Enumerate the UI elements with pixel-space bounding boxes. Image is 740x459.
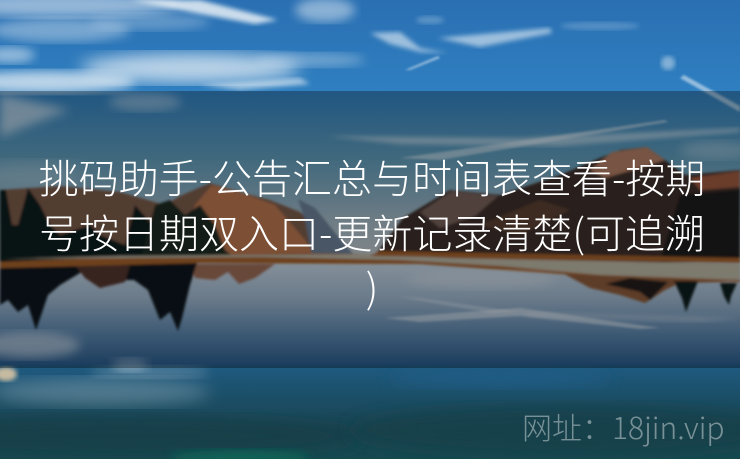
title: ) [366, 257, 378, 315]
clouds in sky [0, 0, 740, 189]
title: 挑码助手-公告汇总与时间表查看-按期 [39, 147, 705, 205]
dark translucent band [0, 91, 740, 368]
mountains and shore [0, 147, 740, 331]
watermark: 网址：18jin.vip [522, 404, 725, 448]
reflected clouds [0, 271, 740, 406]
title [39, 147, 705, 315]
title: 号按日期双入口-更新记录清楚(可追溯 [39, 202, 705, 260]
